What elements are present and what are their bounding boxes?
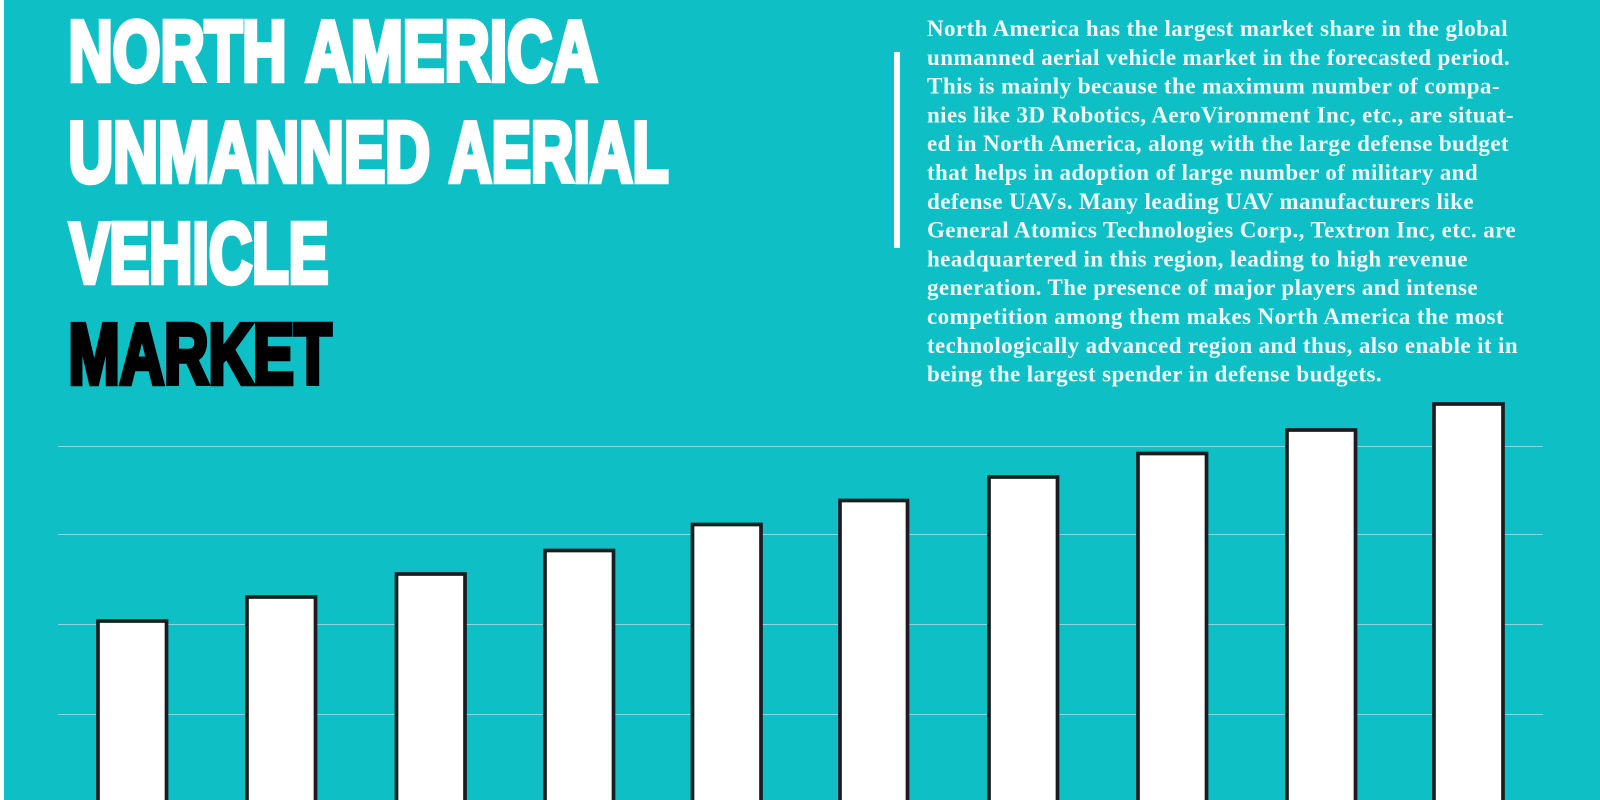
description text block: North America has the largest market share in the global [927, 16, 1508, 41]
description text block: This is mainly because the maximum number of compa- [927, 74, 1500, 98]
description text block: being the largest spender in defense budgets. [927, 362, 1382, 386]
bar 7 [989, 477, 1058, 800]
bar 9 [1287, 430, 1356, 800]
bar 2 [247, 597, 316, 800]
title line: Vehicle: VEHICLE [70, 206, 328, 301]
bar 5 [692, 524, 761, 800]
description text block: generation. The presence of major players and intense [927, 275, 1478, 300]
description text block: unmanned aerial vehicle market in the forecasted period. [927, 45, 1510, 70]
bar 1 [98, 621, 166, 800]
title line: North America: NORTH [68, 4, 286, 99]
bar 8 [1138, 454, 1206, 800]
title [68, 4, 668, 402]
bar 4 [545, 550, 614, 800]
description text block: technologically advanced region and thus, also enable it in [927, 333, 1518, 358]
description text block: competition among them makes North America the most [927, 304, 1504, 329]
title line: Market: MARKET [68, 307, 332, 402]
bar 3 [396, 574, 465, 800]
description text block: defense UAVs. Many leading UAV manufacturers like [927, 189, 1474, 214]
description text block: headquartered in this region, leading to high revenue [927, 246, 1468, 272]
title line: Unmanned Aerial: AERIAL [449, 105, 668, 200]
title line: Unmanned Aerial: UNMANNED [68, 105, 430, 200]
bar 6 [840, 500, 908, 800]
title line: North America: AMERICA [306, 4, 598, 99]
bar 10 [1434, 404, 1503, 800]
description text block [927, 16, 1518, 386]
description text block: that helps in adoption of large number of military and [927, 160, 1478, 185]
description text block: General Atomics Technologies Corp., Textron Inc, etc. are [927, 218, 1516, 242]
accent bar beside description [894, 52, 900, 248]
description text block: ed in North America, along with the large defense budget [927, 131, 1509, 156]
title line: North America [68, 4, 598, 99]
bar chart [58, 404, 1543, 800]
description text block: nies like 3D Robotics, AeroVironment Inc, etc., are situat- [927, 102, 1514, 128]
